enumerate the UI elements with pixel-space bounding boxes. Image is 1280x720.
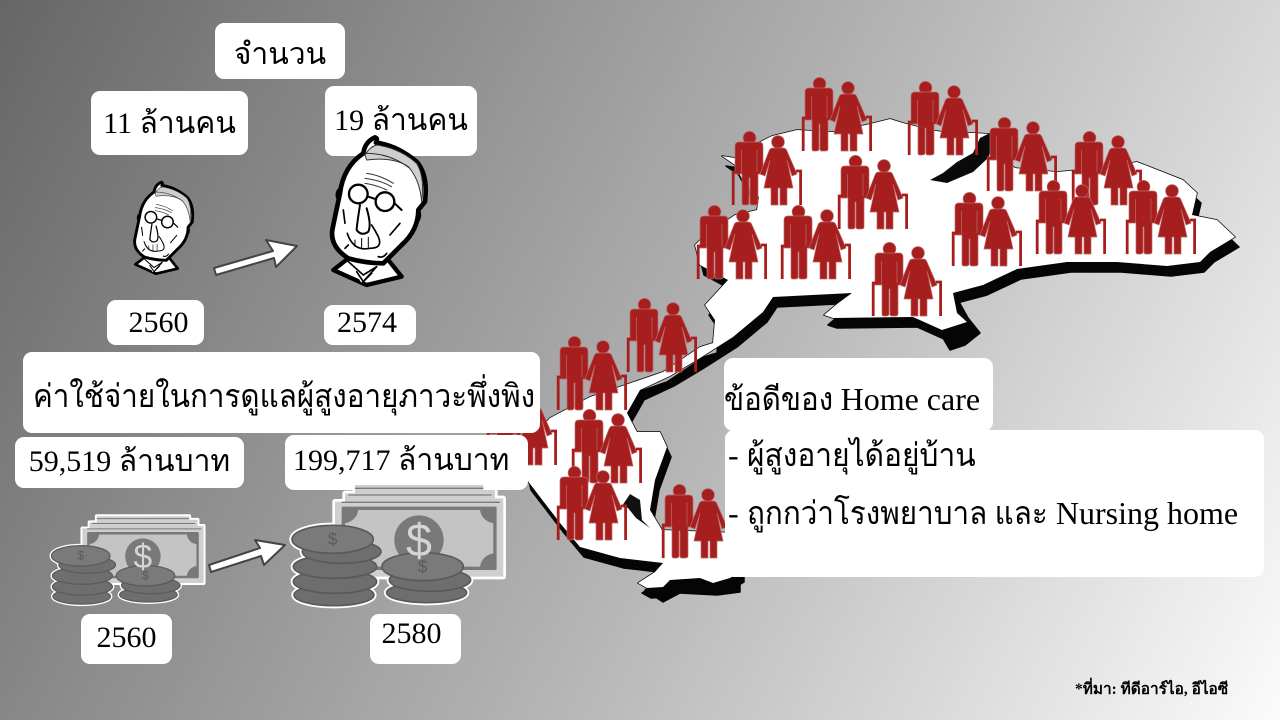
label: home care benefits heading: Home care bbox=[841, 381, 980, 417]
label: year 2560 cost: 2560 bbox=[96, 621, 156, 654]
icon: large money pile: $ bbox=[328, 530, 337, 549]
label: 11 million people bbox=[91, 91, 248, 155]
label: quantity heading: จำนวน bbox=[234, 38, 326, 71]
arrow: elderly growth bbox=[214, 240, 297, 275]
label: year 2574 bbox=[324, 305, 416, 345]
map shadow bbox=[520, 119, 1239, 602]
benefit 2: - Nursing home bbox=[728, 495, 1238, 531]
inland lake bbox=[622, 494, 650, 528]
label: 19 million people: 19 ล้านคน bbox=[334, 104, 468, 137]
icon: small money pile: $ bbox=[142, 569, 149, 583]
icon: large money pile bbox=[292, 485, 503, 606]
icon: small money pile: $ bbox=[77, 549, 84, 563]
arrow: cost growth bbox=[209, 540, 285, 572]
label: 199,717 million baht bbox=[285, 435, 528, 490]
panel: home care benefits bbox=[725, 430, 1264, 577]
label: year 2560: 2560 bbox=[128, 306, 188, 339]
label: 199,717 million baht: 199,717 ล้านบาท bbox=[293, 444, 509, 477]
icon: large elderly man bbox=[332, 137, 426, 285]
icon: small money pile bbox=[51, 516, 204, 604]
label: 11 million people: 11 ล้านคน bbox=[103, 107, 236, 140]
icon: large money pile: $ bbox=[406, 514, 432, 566]
label: home care benefits heading bbox=[724, 358, 993, 431]
elderly couples bbox=[488, 77, 1195, 558]
map land bbox=[520, 119, 1235, 588]
label: year 2560 bbox=[107, 300, 204, 345]
label: year 2580 cost: 2580 bbox=[382, 617, 442, 650]
southern coast shadow bbox=[913, 296, 980, 350]
label: year 2580 cost bbox=[370, 614, 461, 664]
label: year 2560 cost bbox=[81, 614, 172, 664]
label: 19 million people bbox=[325, 86, 477, 156]
icon: large money pile: $ bbox=[418, 557, 427, 576]
label: 59,519 million baht: 59,519 ล้านบาท bbox=[29, 445, 230, 478]
benefit 2: ถูกกว่าโรงพยาบาล และ bbox=[747, 495, 1047, 531]
label: care cost heading bbox=[23, 352, 540, 433]
benefit 1: ผู้สูงอายุได้อยู่บ้าน bbox=[747, 437, 975, 473]
source note: *ที่มา: ทีดีอาร์ไอ, อีไอซี bbox=[1075, 681, 1228, 698]
label: 59,519 million baht bbox=[15, 437, 244, 488]
benefit 1: - bbox=[728, 437, 739, 473]
label: year 2574: 2574 bbox=[337, 306, 397, 339]
northern river patch bbox=[930, 133, 995, 183]
label: quantity heading bbox=[215, 23, 345, 79]
icon: small elderly man bbox=[135, 182, 193, 274]
icon: small money pile: $ bbox=[134, 538, 152, 576]
label: home care benefits heading: ข้อดีของ bbox=[724, 381, 833, 417]
label: care cost heading: ค่าใช้จ่ายในการดูแลผู้สูงอายุภาวะพึ่งพิง bbox=[33, 378, 535, 414]
